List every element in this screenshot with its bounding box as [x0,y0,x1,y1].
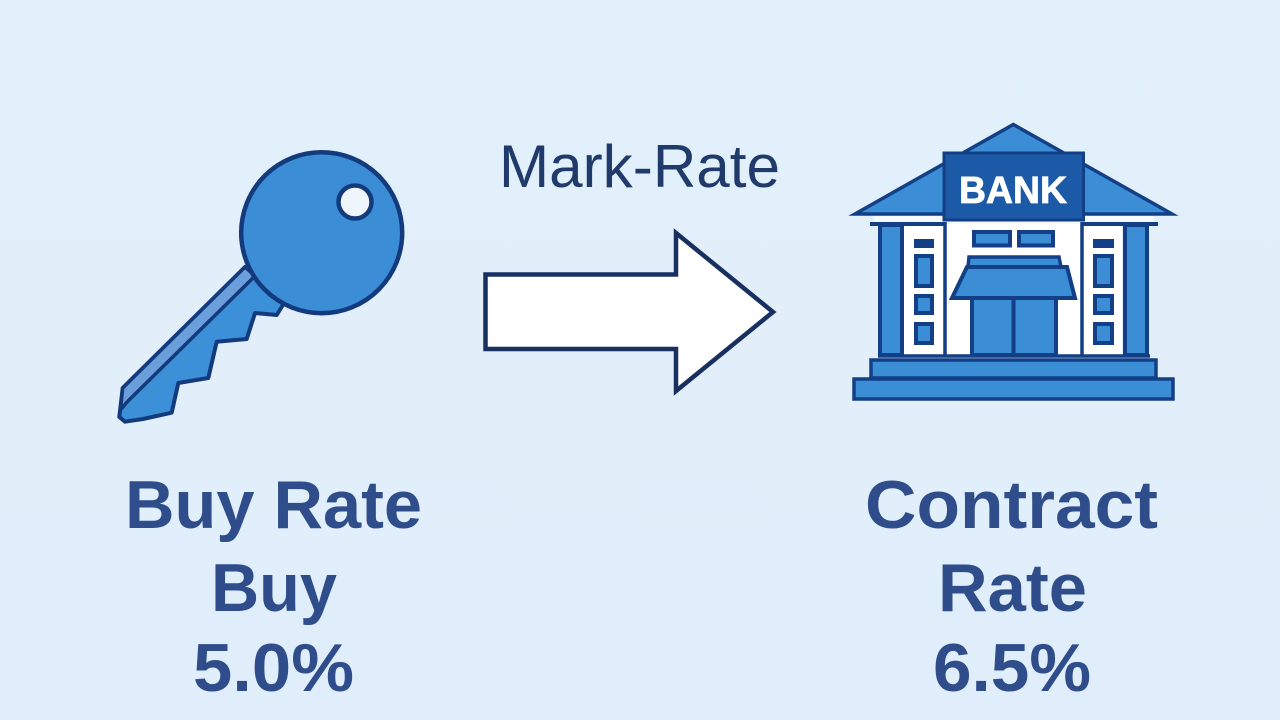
bank sign [944,153,1084,220]
bank awning [968,257,1061,267]
arrow [486,233,773,391]
bank cornice [870,222,1158,226]
icon: key [119,152,402,422]
icon: bank [854,124,1173,399]
bank upper windows [974,232,1053,246]
label: Buy Rate Buy 5.0%: Buy Rate [125,467,422,543]
bank left windows [916,241,932,343]
bank steps [871,360,1156,378]
label: Buy Rate Buy 5.0%: 5.0% [193,630,354,706]
label: Contract Rate 6.5%: Contract [865,467,1158,543]
label: Buy Rate Buy 5.0%: Buy [211,550,337,626]
label: Buy Rate Buy 5.0% [125,467,422,706]
bank columns [880,225,902,355]
bank roof [855,124,1172,214]
label: Contract Rate 6.5%: Rate [938,550,1087,626]
label: Contract Rate 6.5%: 6.5% [933,630,1091,706]
bank right windows [1095,241,1112,343]
label: Contract Rate 6.5% [865,467,1158,706]
bank walls [904,224,1122,356]
bank white frieze [874,216,1154,224]
bank door [972,298,1056,355]
bank sign text: BANK [959,170,1068,212]
label: Mark-Rate: Mark-Rate [499,133,780,200]
